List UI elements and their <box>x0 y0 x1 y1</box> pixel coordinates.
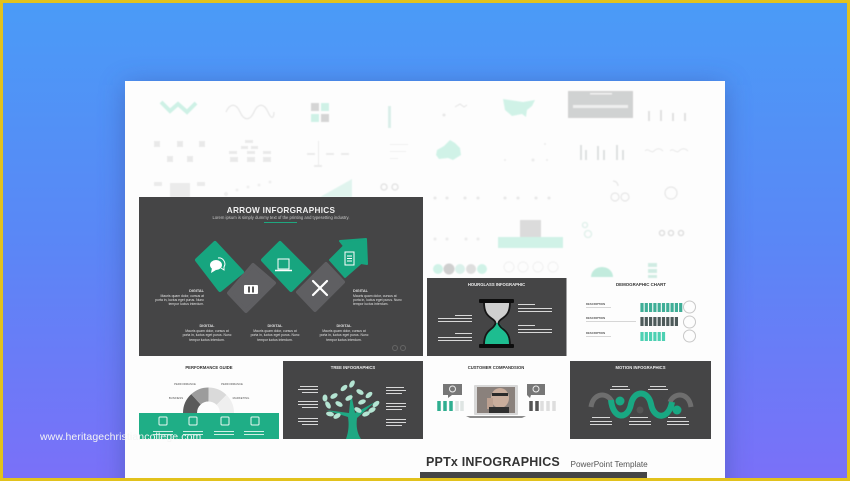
text: digital left: porta in, luctus eget purus. Nunc <box>155 298 204 302</box>
heading: HOURGLASS INFOGRAPHIC <box>468 282 525 287</box>
people left <box>439 401 451 411</box>
thumbnail: zigzag arrows <box>161 102 196 112</box>
text: digital left <box>155 289 205 306</box>
heading: CUSTOMER COMPANDSION <box>468 365 524 370</box>
people right <box>531 401 537 411</box>
thumbnail: partial third row <box>154 182 205 197</box>
faded thumbnail grid <box>154 91 688 278</box>
donut labels: BUSINESS <box>169 396 183 400</box>
thumbnail: row of round icons <box>433 264 487 274</box>
title: PPTx Infographics: PPTx INFOGRAPHICS <box>426 455 560 469</box>
thumbnail: bubbles <box>582 222 592 238</box>
white template sheet <box>125 81 725 478</box>
grey tile two <box>298 264 343 310</box>
icon: speech bubbles <box>210 258 225 273</box>
thumbnail: dotted rows <box>434 196 550 200</box>
tree left notes <box>298 386 318 425</box>
thumbnail: outline circles <box>504 262 558 272</box>
panel: customer companion <box>439 365 554 418</box>
thumbnail: network line <box>442 104 467 116</box>
thumbnail: bar chart <box>580 145 624 160</box>
thumbnail: text lines <box>390 144 408 159</box>
band icons <box>159 417 259 425</box>
row label underlines <box>586 307 636 337</box>
thumbnail: wave <box>226 105 274 119</box>
text: digital bottom two: porta in, luctus eget purus. Nunc <box>251 333 300 337</box>
text: digital bottom one <box>183 324 232 342</box>
text: digital bottom two <box>251 324 300 342</box>
panel: arrow infographics <box>139 197 423 356</box>
donut labels: PERFORMANCE <box>221 382 243 386</box>
thumbnail: row dots 2 <box>434 238 480 240</box>
thumbnail: dots rising <box>224 180 272 196</box>
text: digital bottom two: DIGITAL <box>268 324 283 328</box>
tree right notes <box>386 387 406 426</box>
thumbnail: two circles <box>381 184 398 190</box>
heading: DEMOGRAPHIC CHART <box>616 282 666 287</box>
thumbnail: USA map <box>503 99 535 117</box>
thumbnail: small dots <box>504 143 548 162</box>
people right faded <box>542 401 554 411</box>
people row two <box>642 317 676 326</box>
text: digital bottom one: Mauris quam dolor, cursus at <box>185 329 229 333</box>
text: digital bottom three: porta in, luctus eget purus. Nunc <box>320 333 369 337</box>
tree <box>322 379 381 439</box>
donut labels: PERFORMANCE <box>174 382 196 386</box>
row labels: DESCRIPTION <box>586 331 605 335</box>
icon: battery <box>244 285 258 294</box>
text: digital left: Mauris quam dolor, cursus at <box>160 294 204 298</box>
hourglass <box>479 299 514 348</box>
row labels: DESCRIPTION <box>586 316 605 320</box>
donut labels: MARKETING <box>233 396 249 400</box>
heading: ARROW INFORGRAPHICS <box>227 206 335 215</box>
thumbnail: ring pair <box>611 181 629 201</box>
heading: TREE INFOGRAPHICS <box>331 365 375 370</box>
band captions <box>153 431 264 435</box>
thumbnail: Australia map <box>436 140 461 160</box>
panel: motion infographics <box>570 361 711 439</box>
icon: tools <box>313 281 327 295</box>
text: digital bottom one: DIGITAL <box>200 324 215 328</box>
thumbnail: three dots <box>660 230 684 236</box>
green band <box>139 413 279 439</box>
text: digital bottom one: tempor luctus interdum. <box>189 338 225 342</box>
people row one <box>642 303 681 312</box>
thumbnail: org chart <box>229 140 271 162</box>
thumbnail: half donut <box>591 267 613 277</box>
text: digital right: DIGITAL <box>353 289 369 293</box>
icon: document <box>345 252 354 265</box>
text: digital bottom three <box>320 324 369 342</box>
text: digital left: tempor luctus interdum. <box>169 302 204 306</box>
text: digital bottom one: porta in, luctus eget purus. Nunc <box>183 333 232 337</box>
text: digital right: tempor luctus interdum. <box>353 302 388 306</box>
green tile one <box>197 243 242 290</box>
grey wave ends <box>591 395 691 407</box>
donut labels <box>169 382 249 400</box>
panel: hourglass infographic <box>427 278 566 356</box>
panel: tree infographics <box>283 361 423 439</box>
thumbnail: small waves <box>645 149 688 152</box>
green tile two <box>263 243 309 290</box>
heading: MOTION INFOGRAPHICS <box>615 365 666 370</box>
thumbnail: vertical figure <box>388 106 391 128</box>
green wave <box>611 394 672 416</box>
thumbnail: photo with mint banner <box>498 220 563 248</box>
text: digital bottom two: Mauris quam dolor, cursus at <box>253 329 297 333</box>
text: digital right <box>353 289 402 306</box>
subtitle: Lorem ipsum is simply dummy text of the printing and typesetting industry. <box>212 215 350 220</box>
hourglass left notes <box>438 315 472 341</box>
thumbnail: node row <box>154 141 205 162</box>
text: digital bottom two: tempor luctus interdum. <box>257 338 293 342</box>
text: digital left: DIGITAL <box>189 289 205 293</box>
rings <box>684 301 696 342</box>
text: digital bottom three: tempor luctus interdum. <box>326 338 362 342</box>
laptop with photo <box>466 385 526 418</box>
thumbnail: clock ring <box>665 187 677 199</box>
people row three <box>642 332 664 341</box>
thumbnail: grey panel <box>568 91 633 118</box>
subtitle: PowerPoint Template: PowerPoint Template <box>570 460 648 469</box>
panel: performance guide <box>139 365 279 439</box>
page dots <box>392 346 406 350</box>
thumbnail: diagonal stripes <box>320 179 352 197</box>
green arrow tile <box>330 239 367 277</box>
thumbnail: four squares <box>311 103 329 122</box>
callout right <box>527 384 545 398</box>
hourglass right notes <box>518 304 552 333</box>
motion notes <box>590 386 689 425</box>
row labels: DESCRIPTION <box>586 302 605 306</box>
text: digital bottom three: DIGITAL <box>337 324 352 328</box>
text: digital right: porta in, luctus eget purus. Nunc <box>353 298 402 302</box>
grey tile one <box>229 265 274 311</box>
thumbnail: top right bars <box>648 110 686 121</box>
heading: PERFORMANCE GUIDE <box>185 365 233 370</box>
people left faded <box>457 401 462 411</box>
callout left <box>443 384 462 398</box>
thumbnail: stacked icons <box>648 263 657 278</box>
text: digital bottom three: Mauris quam dolor, cursus at <box>322 329 366 333</box>
row labels <box>586 302 605 335</box>
text: digital right: Mauris quam dolor, cursus at <box>353 294 397 298</box>
wave nodes <box>598 396 682 414</box>
icon: laptop <box>275 259 292 270</box>
dark bar at bottom <box>420 472 647 478</box>
watermark url: www.heritagechristiancollege.com <box>39 431 202 443</box>
half donut chart <box>190 394 227 413</box>
thumbnail: timeline cross <box>307 141 349 167</box>
panel: demographic chart <box>586 282 696 342</box>
